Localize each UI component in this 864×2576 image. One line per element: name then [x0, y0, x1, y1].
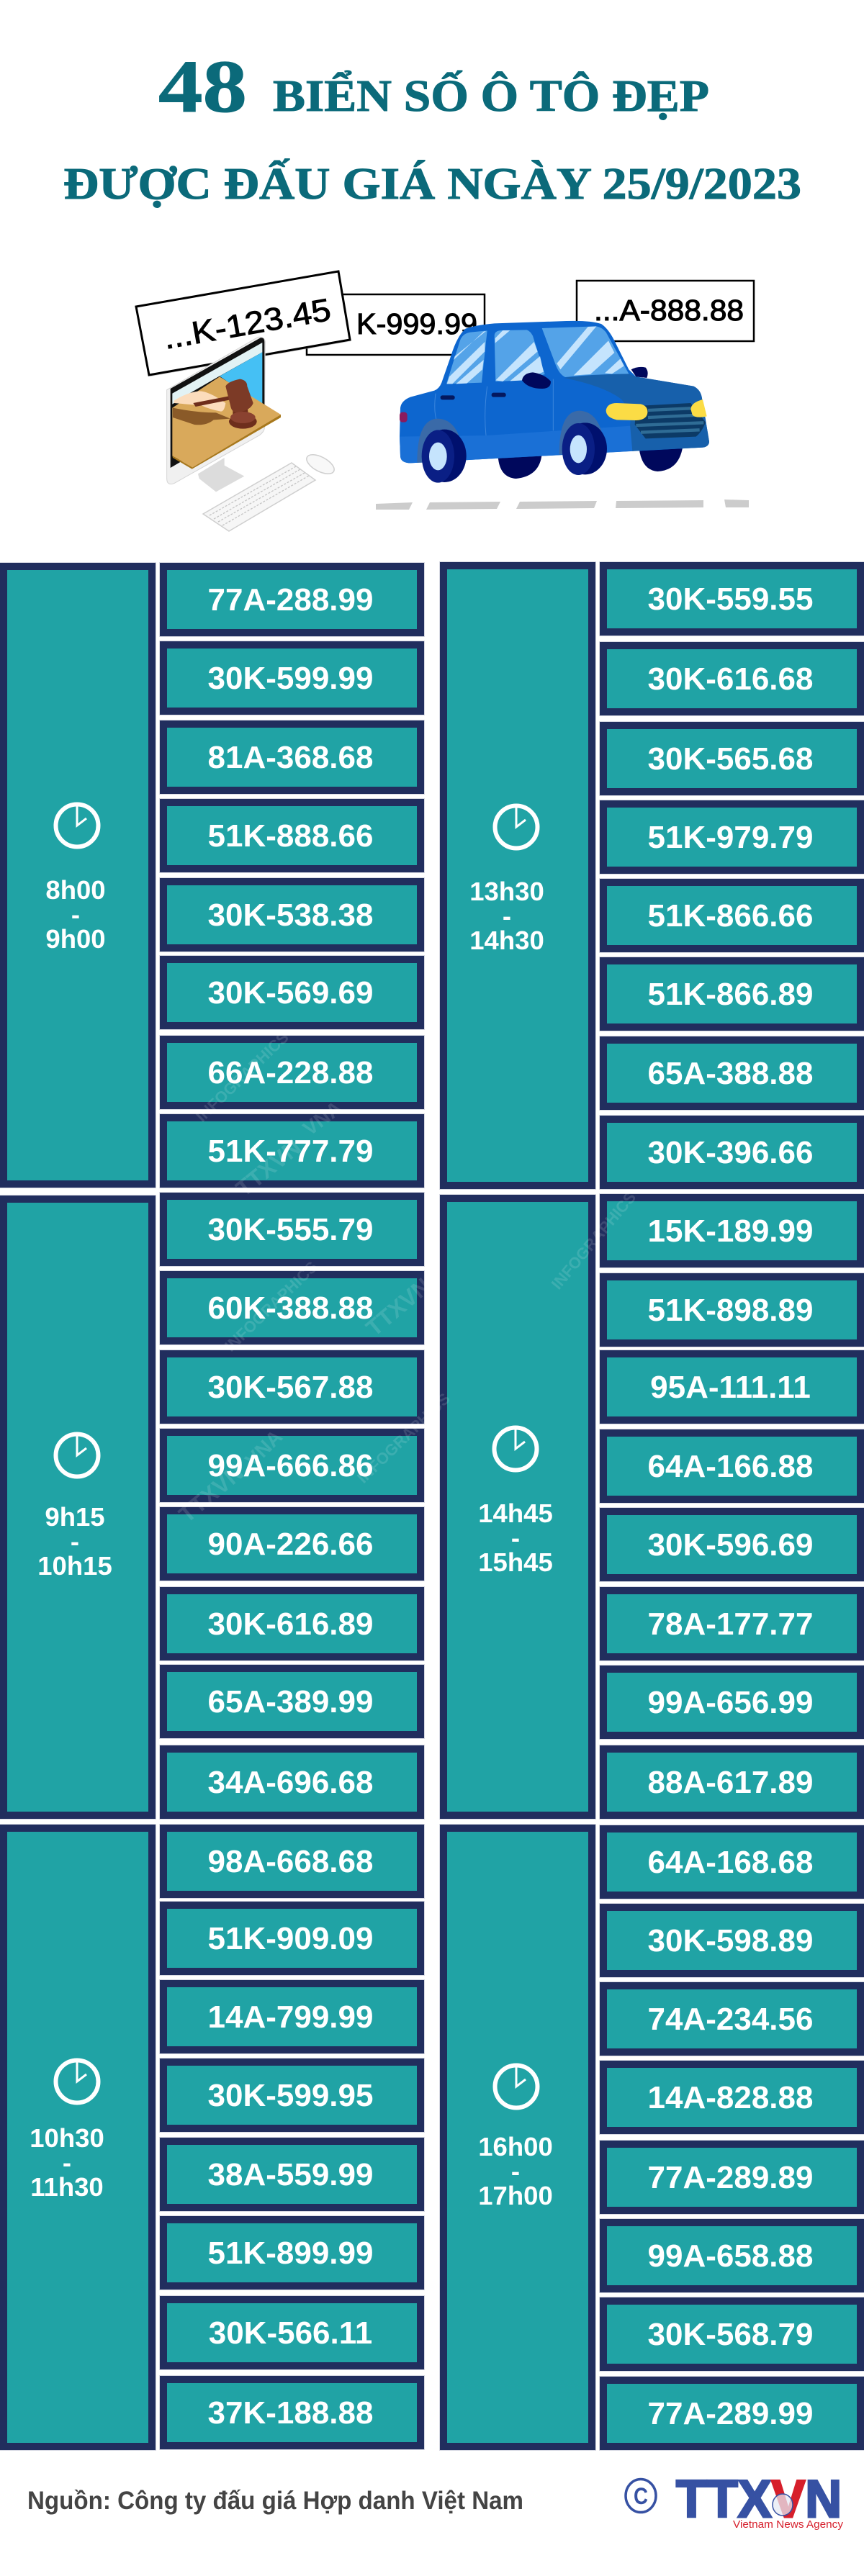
time: 11h30 [30, 2172, 104, 2202]
plate [160, 1587, 424, 1660]
plate [160, 1745, 424, 1819]
plate [160, 1271, 424, 1345]
plate: 30K-538.38 [208, 898, 373, 933]
icon: computer with auction gavel [167, 337, 281, 492]
plate: 51K-888.66 [208, 818, 373, 854]
panel: 9h15 - 10h15 [0, 1196, 156, 1819]
plate: 66A-228.88 [208, 1055, 373, 1090]
group 8h00 - 9h00 [0, 562, 425, 1188]
time [478, 1499, 553, 1577]
label plate: K-123.45 [136, 271, 351, 376]
time: 9h00 [45, 924, 106, 954]
plate: 90A-226.66 [208, 1527, 373, 1562]
title: BIỂN SỐ Ô TÔ ĐẸP [273, 71, 709, 121]
panel: 14h45 - 15h45 [440, 1195, 595, 1819]
panel: 8h00 - 9h00 [0, 563, 156, 1188]
plate: 14A-799.99 [208, 1999, 373, 2035]
plate: 30K-599.95 [208, 2078, 373, 2113]
plate [600, 2061, 864, 2134]
plate: 30K-568.79 [648, 2317, 813, 2352]
plate: 15K-189.99 [648, 1214, 813, 1249]
plate [600, 1508, 864, 1581]
plate: 99A-656.99 [648, 1685, 813, 1720]
watermark: VNA [240, 1426, 287, 1471]
plate: 51K-866.89 [648, 977, 813, 1012]
plate [600, 800, 864, 874]
icon: clock [53, 1432, 101, 1478]
plate [160, 1193, 424, 1266]
title: ĐƯỢC ĐẤU GIÁ NGÀY 25/9/2023 [63, 159, 801, 209]
time: 17h00 [478, 2181, 553, 2210]
watermark [174, 1028, 639, 1527]
time [469, 877, 544, 955]
time: 8h00 [45, 875, 106, 905]
plate: 14A-828.88 [648, 2080, 813, 2115]
plate: 51K-777.79 [208, 1134, 373, 1169]
plate: 64A-168.68 [648, 1845, 813, 1880]
plate [160, 878, 424, 952]
time: 16h00 [478, 2132, 553, 2161]
plate: 99A-658.88 [648, 2238, 813, 2274]
plate: 30K-567.88 [208, 1370, 373, 1405]
plate [600, 1350, 864, 1424]
plate: 51K-899.99 [208, 2236, 373, 2271]
road dashes [376, 500, 749, 510]
copyright mark [626, 2479, 656, 2512]
label plate: A-888.88 [577, 281, 754, 341]
group 13h30 - 14h30 [439, 561, 864, 1190]
icon: clock [492, 2063, 540, 2110]
plate [600, 1825, 864, 1899]
plate: 30K-555.79 [208, 1212, 373, 1247]
time: 10h15 [37, 1551, 112, 1581]
plate [160, 799, 424, 872]
plate [600, 1745, 864, 1819]
plate [600, 562, 864, 636]
time: 15h45 [478, 1547, 553, 1577]
plate [160, 1902, 424, 1975]
group 9h15 - 10h15 [0, 1192, 425, 1820]
title and illustration [63, 45, 801, 532]
source: Nguồn: Công ty đấu giá Hợp danh Việt Nam [27, 2487, 523, 2515]
plate [160, 1980, 424, 2053]
plate: 88A-617.89 [648, 1765, 813, 1800]
label plate: K-123.45: ...K-123.45 [161, 292, 333, 356]
panel: 16h00 - 17h00 [440, 1825, 595, 2450]
plate: 74A-234.56 [648, 2002, 813, 2037]
plate: 37K-188.88 [208, 2395, 373, 2431]
plate: 30K-599.99 [208, 661, 373, 696]
label plate: K-999.99 [307, 294, 485, 355]
time [45, 875, 106, 954]
plate: 51K-979.79 [648, 820, 813, 855]
plate [160, 2216, 424, 2290]
plate: 78A-177.77 [648, 1606, 813, 1642]
plate: 98A-668.68 [208, 1844, 373, 1879]
plate [600, 1587, 864, 1660]
plate [600, 1666, 864, 1739]
panel: 13h30 - 14h30 [440, 562, 595, 1189]
plate [600, 2141, 864, 2214]
group 16h00 - 17h00 [439, 1824, 864, 2451]
plate: 77A-288.99 [208, 582, 373, 618]
watermark: INFOGRAPHICS [548, 1188, 639, 1293]
icon: clock [492, 803, 540, 851]
plate: 95A-111.11 [650, 1370, 811, 1405]
plate: 34A-696.68 [208, 1765, 373, 1800]
plate [160, 641, 424, 715]
plate [600, 1273, 864, 1347]
plate [600, 1429, 864, 1503]
plate: 30K-596.69 [648, 1527, 813, 1563]
plate [600, 957, 864, 1031]
plate: 30K-559.55 [648, 582, 813, 617]
plate [160, 2138, 424, 2211]
icon: blue car [400, 321, 709, 483]
watermark: INFOGRAPHICS [192, 1028, 292, 1126]
time: 10h30 [30, 2123, 104, 2153]
watermark: INFOGRAPHICS [221, 1257, 321, 1355]
time [30, 2123, 104, 2202]
logo: TTXVN: Vietnam News Agency [733, 2518, 844, 2531]
plate [600, 722, 864, 795]
plate [160, 2296, 424, 2369]
icon: mouse [304, 451, 337, 478]
plate [160, 1036, 424, 1109]
plate: 51K-909.09 [208, 1921, 373, 1956]
icon: keyboard [203, 463, 315, 531]
plate [160, 1665, 424, 1738]
plate: 99A-666.86 [208, 1448, 373, 1483]
plate: 30K-566.11 [209, 2315, 372, 2351]
plate [160, 1114, 424, 1188]
plate [160, 720, 424, 794]
title [63, 45, 801, 209]
plate [600, 2219, 864, 2292]
time: 9h15 [45, 1502, 105, 1532]
plate: 30K-616.89 [208, 1606, 373, 1642]
icon: clock [492, 1425, 539, 1473]
plate [600, 1036, 864, 1110]
plate: 64A-166.88 [648, 1449, 813, 1484]
plate [600, 642, 864, 715]
plate [600, 2377, 864, 2450]
group 10h30 - 11h30 [0, 1824, 425, 2451]
plate [600, 1904, 864, 1977]
label plate: A-888.88: ...A-888.88 [594, 294, 744, 327]
plate: 65A-389.99 [208, 1684, 373, 1719]
panel: 10h30 - 11h30 [0, 1825, 156, 2450]
group 14h45 - 15h45 [439, 1193, 864, 1820]
plate: 30K-616.68 [648, 661, 813, 697]
plate [600, 879, 864, 952]
time: - [63, 2148, 71, 2177]
copyright mark: C [634, 2483, 648, 2509]
time: 13h30 [469, 877, 544, 906]
plate [160, 956, 424, 1029]
plate: 81A-368.68 [208, 740, 373, 775]
watermark: TTXVN [174, 1459, 248, 1527]
label plate: K-999.99: K-999.99 [356, 307, 477, 340]
time: - [71, 900, 80, 929]
watermark: VNA [299, 1096, 346, 1140]
time: 14h30 [469, 926, 544, 955]
plate [600, 1982, 864, 2056]
plate: 51K-866.66 [648, 898, 813, 934]
title: 48 [158, 45, 247, 128]
watermark: TTXVN [231, 1134, 306, 1201]
watermark: INFOGRAPHICS [354, 1389, 454, 1487]
plate: 65A-388.88 [648, 1056, 813, 1091]
time: - [503, 901, 511, 931]
plate: 38A-559.99 [208, 2157, 373, 2192]
plate: 51K-898.89 [648, 1293, 813, 1328]
plate: 30K-569.69 [208, 975, 373, 1011]
plate: 30K-598.89 [648, 1923, 813, 1958]
plate [600, 1116, 864, 1189]
plate: 77A-289.99 [648, 2396, 813, 2431]
plate [160, 1429, 424, 1502]
time: 14h45 [478, 1499, 553, 1528]
plate [160, 1507, 424, 1581]
time [37, 1502, 112, 1581]
time [478, 2132, 553, 2210]
plate: 60K-388.88 [208, 1291, 373, 1326]
time: - [511, 1523, 520, 1553]
watermark: TTXVN [361, 1273, 436, 1341]
time: - [511, 2156, 520, 2186]
plate [160, 1350, 424, 1424]
icon: clock [53, 2058, 101, 2105]
plate [160, 563, 424, 636]
plate [160, 1825, 424, 1898]
icon: clock [53, 802, 101, 849]
logo: TTXVN: TTXVN [676, 2470, 842, 2528]
plate: 77A-289.89 [648, 2160, 813, 2195]
time: - [71, 1527, 79, 1556]
footer [27, 2470, 844, 2531]
plate [600, 2297, 864, 2371]
plate: 30K-396.66 [648, 1135, 813, 1170]
plate: 30K-565.68 [648, 741, 813, 777]
plate [160, 2058, 424, 2132]
plate [160, 2376, 424, 2449]
plate [600, 1194, 864, 1267]
